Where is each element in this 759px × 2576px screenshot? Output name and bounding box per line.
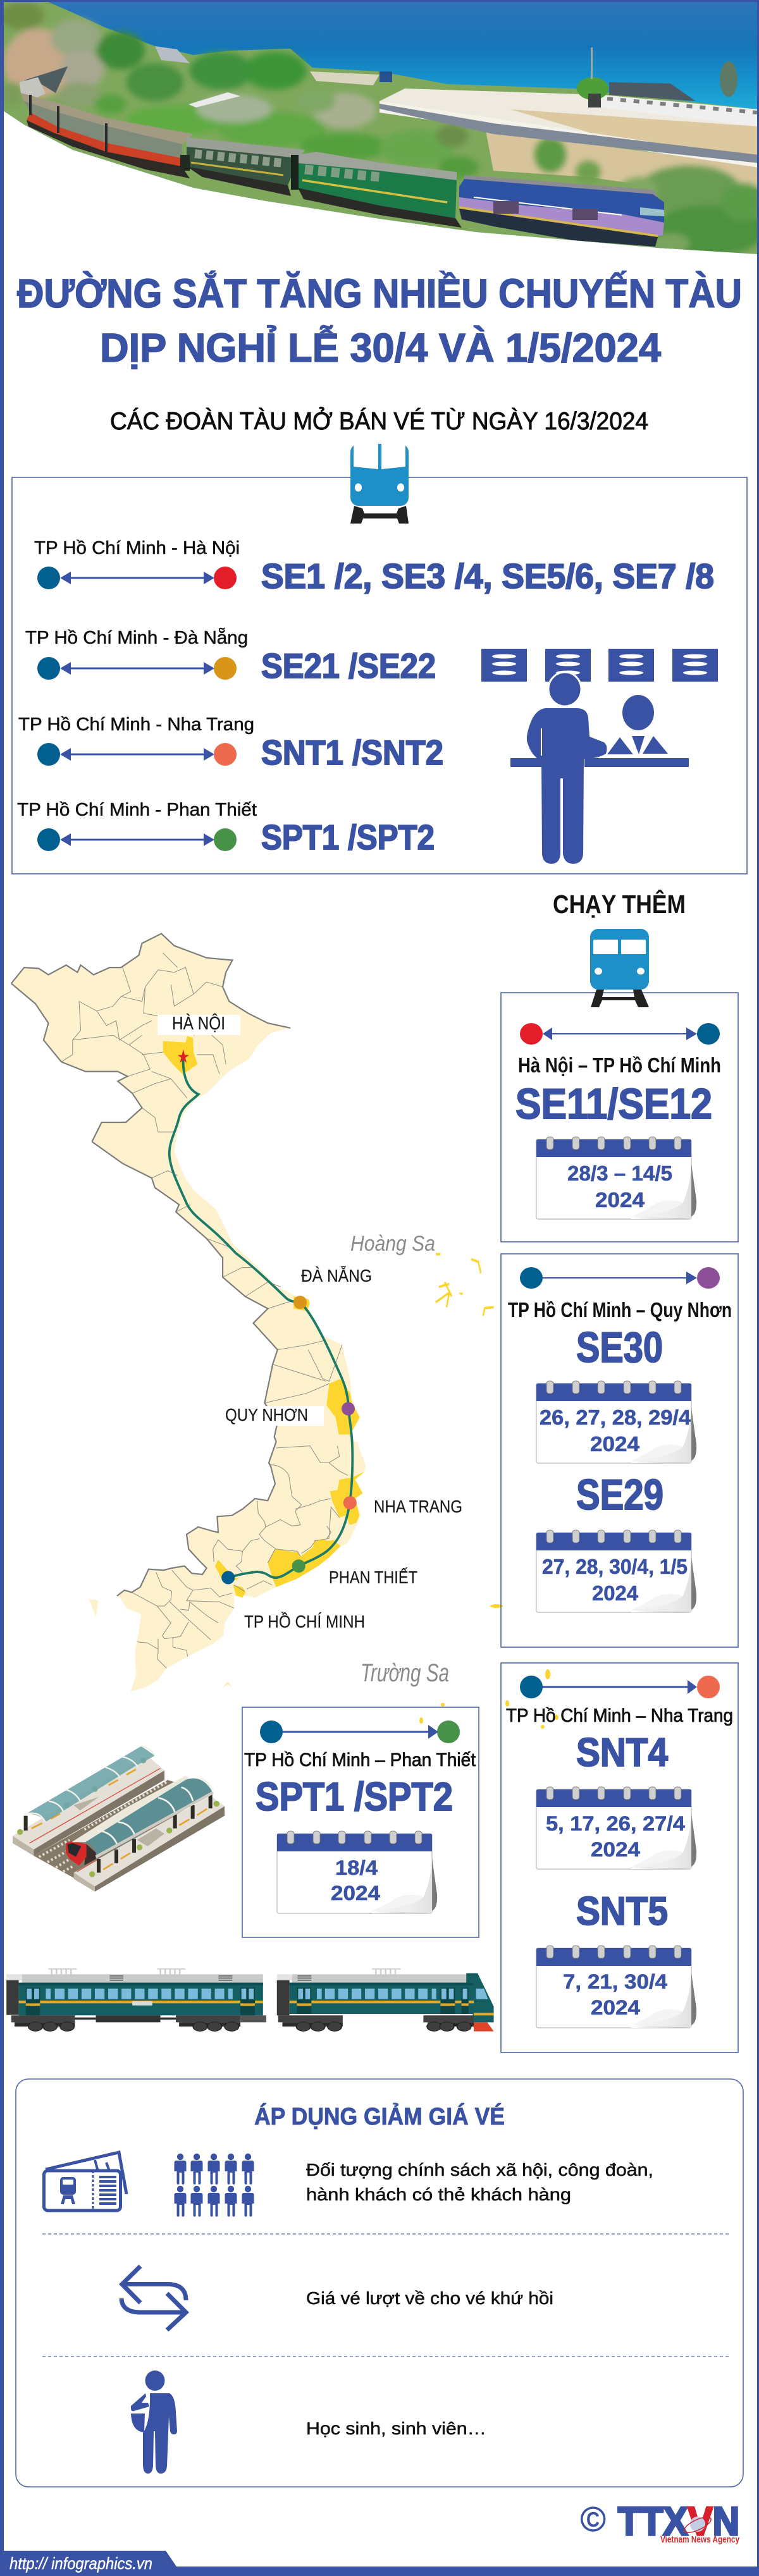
green carriage 2 — [297, 152, 457, 180]
icon: tickets — [44, 2152, 126, 2211]
northern details — [11, 934, 494, 1617]
route row: Nha Trang: TP Hồ Chí Minh - Nha Trang — [18, 715, 254, 735]
front platform — [74, 1796, 225, 1886]
subheading: CÁC ĐOÀN TÀU MỞ BÁN VÉ TỪ NGÀY 16/3/2024 — [110, 407, 648, 435]
city markers — [178, 1050, 357, 1585]
panel: SPT1/SPT2: SPT1 /SPT2 — [256, 1775, 453, 1819]
icon: student — [131, 2371, 177, 2474]
logo: TTXVN: TTXVN — [618, 2499, 739, 2544]
northern and central land — [11, 934, 360, 1447]
track bed — [34, 1780, 211, 1878]
logo: TTXVN: Vietnam News Agency — [660, 2534, 740, 2545]
route row: Đà Nẵng — [25, 627, 436, 685]
panel: SE11/SE12: Hà Nội – TP Hồ Chí Minh — [518, 1053, 721, 1077]
calendar: 2024 — [592, 1581, 639, 1605]
route row: Hà Nội — [34, 538, 714, 596]
calendar: 2024 — [590, 1432, 640, 1456]
panel: SPT1/SPT2 — [242, 1707, 479, 1937]
map labels: HÀ NỘI — [172, 1012, 225, 1034]
heading: extra trains: CHẠY THÊM — [553, 890, 686, 919]
route row: Hà Nội: SE1 /2, SE3 /4, SE5/6, SE7 /8 — [261, 556, 714, 596]
calendar — [277, 1831, 437, 1913]
calendar: 26, 27, 28, 29/4 — [540, 1406, 691, 1429]
map labels: PHAN THIẾT — [329, 1567, 417, 1587]
discount text 3: Học sinh, sinh viên… — [306, 2419, 486, 2438]
map labels: QUY NHƠN — [225, 1405, 308, 1425]
locomotive — [464, 175, 658, 196]
calendar: 2024 — [591, 1996, 640, 2019]
southern land — [117, 1442, 366, 1691]
panel: SE30 / SE29: SE30 — [576, 1323, 663, 1371]
illustration: railway station — [13, 1746, 225, 1892]
calendar — [536, 1787, 696, 1869]
logo: TTXVN: C — [586, 2508, 600, 2531]
discount text 1: hành khách có thẻ khách hàng — [306, 2185, 571, 2204]
panel: SPT1/SPT2: TP Hồ Chí Minh – Phan Thiết — [244, 1750, 476, 1770]
far carriages — [24, 66, 68, 93]
panel: SE30 / SE29 — [501, 1254, 738, 1647]
calendar: 2024 — [595, 1188, 645, 1211]
map of Vietnam with rail route — [11, 934, 494, 1691]
hero photo: train along the coast — [0, 0, 759, 259]
route row: Hà Nội: TP Hồ Chí Minh - Hà Nội — [34, 538, 240, 558]
panel: SNT4 / SNT5: TP Hồ Chí Minh – Nha Trang — [506, 1705, 733, 1726]
front canopy — [71, 1776, 191, 1842]
route row: Phan Thiết: TP Hồ Chí Minh - Phan Thiết — [17, 800, 257, 820]
route row: Phan Thiết — [17, 800, 435, 857]
icon: group of people — [175, 2154, 254, 2217]
icon: ticket counter — [481, 649, 718, 864]
panel: SE11/SE12: SE11/SE12 — [515, 1080, 712, 1128]
calendar — [536, 1530, 696, 1612]
calendar: 28/3 – 14/5 — [567, 1162, 672, 1185]
panel: SNT4 / SNT5 — [501, 1663, 738, 2052]
illustration: train carriages — [6, 1969, 494, 2032]
calendar: 27, 28, 30/4, 1/5 — [542, 1555, 688, 1578]
panel: ticket discounts — [16, 2079, 743, 2487]
map labels: ĐÀ NẴNG — [301, 1265, 372, 1285]
panel: SNT4 / SNT5: SNT5 — [576, 1889, 668, 1934]
panel: SE30 / SE29: SE29 — [576, 1471, 663, 1519]
map labels: Hoàng Sa — [350, 1232, 435, 1256]
calendar: 5, 17, 26, 27/4 — [546, 1812, 685, 1835]
icon: train front — [350, 444, 409, 524]
footer bar with URL: http:// infographics.vn — [9, 2554, 152, 2573]
route row: Đà Nẵng: SE21 /SE22 — [261, 646, 436, 685]
train in front — [84, 1844, 96, 1865]
panel: scheduled trains — [12, 444, 747, 874]
title: DỊP NGHỈ LỄ 30/4 VÀ 1/5/2024 — [100, 324, 661, 371]
map labels: TP HỒ CHÍ MINH — [244, 1612, 365, 1631]
map labels — [157, 1012, 462, 1687]
panel: SNT4 / SNT5: SNT4 — [576, 1731, 668, 1775]
title — [17, 270, 742, 371]
route row: Phan Thiết: SPT1 /SPT2 — [261, 818, 435, 857]
route row: Đà Nẵng: TP Hồ Chí Minh - Đà Nẵng — [25, 627, 248, 648]
calendar — [536, 1946, 696, 2028]
map labels: NHA TRANG — [374, 1497, 462, 1516]
discount text 1 — [306, 2160, 653, 2204]
locomotive — [277, 1969, 494, 2032]
calendar: 7, 21, 30/4 — [563, 1970, 667, 1993]
passenger carriage — [6, 1969, 266, 2031]
discount text 2: Giá vé lượt về cho vé khứ hồi — [306, 2288, 553, 2308]
footer bar with URL — [0, 2551, 759, 2576]
green carriage — [187, 137, 305, 158]
map labels: Trường Sa — [361, 1659, 449, 1687]
calendar: 2024 — [591, 1838, 640, 1861]
route row: Nha Trang: SNT1 /SNT2 — [261, 733, 443, 772]
rear platform — [13, 1756, 164, 1849]
panel: SE11/SE12 — [501, 929, 738, 1242]
calendar — [536, 1381, 696, 1463]
icon: return arrows — [121, 2266, 186, 2330]
route row: Nha Trang — [18, 715, 443, 772]
discount text 1: Đối tượng chính sách xã hội, công đoàn, — [306, 2160, 653, 2180]
panel heading: ÁP DỤNG GIẢM GIÁ VÉ — [254, 2102, 505, 2130]
icon: train front — [590, 929, 649, 1007]
calendar: 2024 — [331, 1882, 380, 1904]
Trường Sa islands — [419, 1604, 558, 1729]
calendar: 18/4 — [335, 1856, 378, 1879]
calendar — [536, 1137, 696, 1219]
rear canopy — [27, 1746, 155, 1822]
